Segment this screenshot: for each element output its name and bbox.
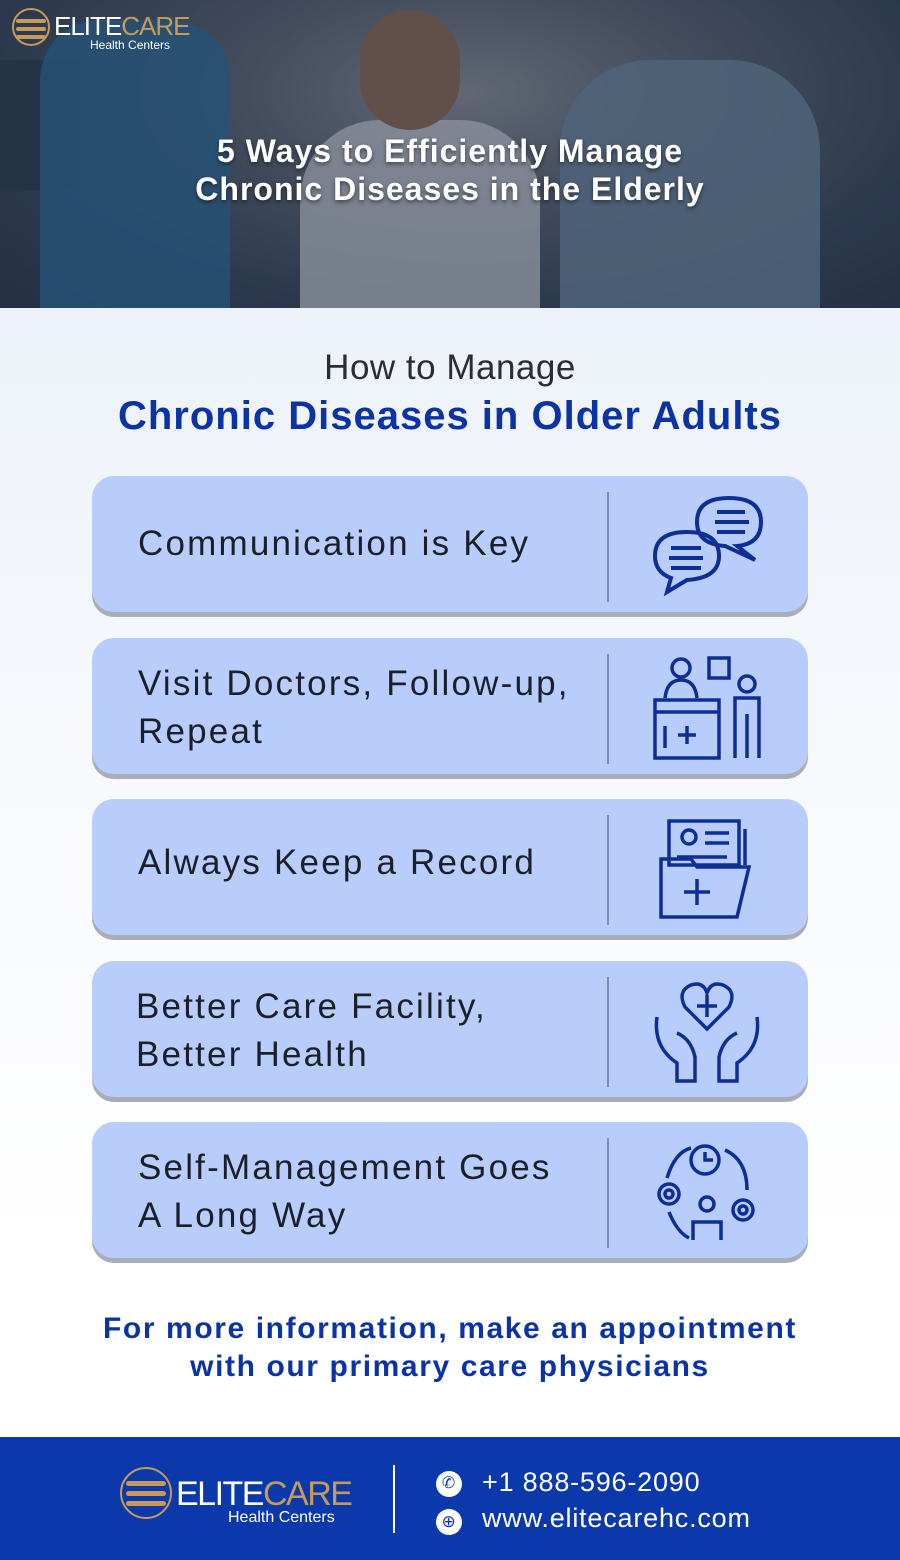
card 2 [92, 638, 808, 774]
card 5 [92, 1122, 808, 1258]
card 3: Always Keep a Record [138, 843, 536, 882]
hero title: 5 Ways to Efficiently Manage [217, 133, 683, 169]
footer logo [120, 1467, 352, 1526]
logo top: ELITECARE [54, 11, 190, 41]
card 1 [92, 476, 808, 612]
heading: How to Manage [324, 348, 576, 387]
card 5: Self-Management Goes [138, 1148, 552, 1187]
card 5: A Long Way [138, 1196, 347, 1235]
card 2: Repeat [138, 712, 264, 751]
heading: Chronic Diseases in Older Adults [118, 394, 782, 438]
hero title: Chronic Diseases in the Elderly [195, 171, 705, 207]
heading [118, 348, 782, 438]
card 1: Communication is Key [138, 524, 530, 563]
logo top: Health Centers [90, 38, 170, 52]
hero photo [0, 0, 900, 308]
contact info: ✆ [442, 1475, 456, 1492]
footer logo: Health Centers [228, 1509, 335, 1526]
call to action text: with our primary care physicians [190, 1350, 710, 1383]
icon: gears clock [657, 1144, 755, 1240]
icon: chat [653, 496, 763, 596]
footer [0, 1437, 900, 1560]
call to action text: For more information, make an appointment [103, 1312, 797, 1345]
icon: record folder [659, 819, 752, 919]
contact info: ⊕ [441, 1512, 457, 1531]
card 2: Visit Doctors, Follow-up, [138, 664, 570, 703]
card 3 [92, 799, 808, 935]
call to action text [103, 1312, 797, 1383]
card 4: Better Care Facility, [136, 987, 487, 1026]
card 4 [92, 961, 808, 1097]
contact info: www.elitecarehc.com [482, 1503, 751, 1533]
hero title [194, 133, 705, 210]
card 4: Better Health [136, 1035, 369, 1074]
contact info [436, 1467, 751, 1535]
contact info: +1 888-596-2090 [482, 1467, 700, 1497]
logo top [12, 8, 190, 52]
footer logo: ELITECARE [176, 1475, 351, 1513]
icon: doctor desk [653, 656, 761, 760]
icon: hands heart [654, 982, 760, 1083]
